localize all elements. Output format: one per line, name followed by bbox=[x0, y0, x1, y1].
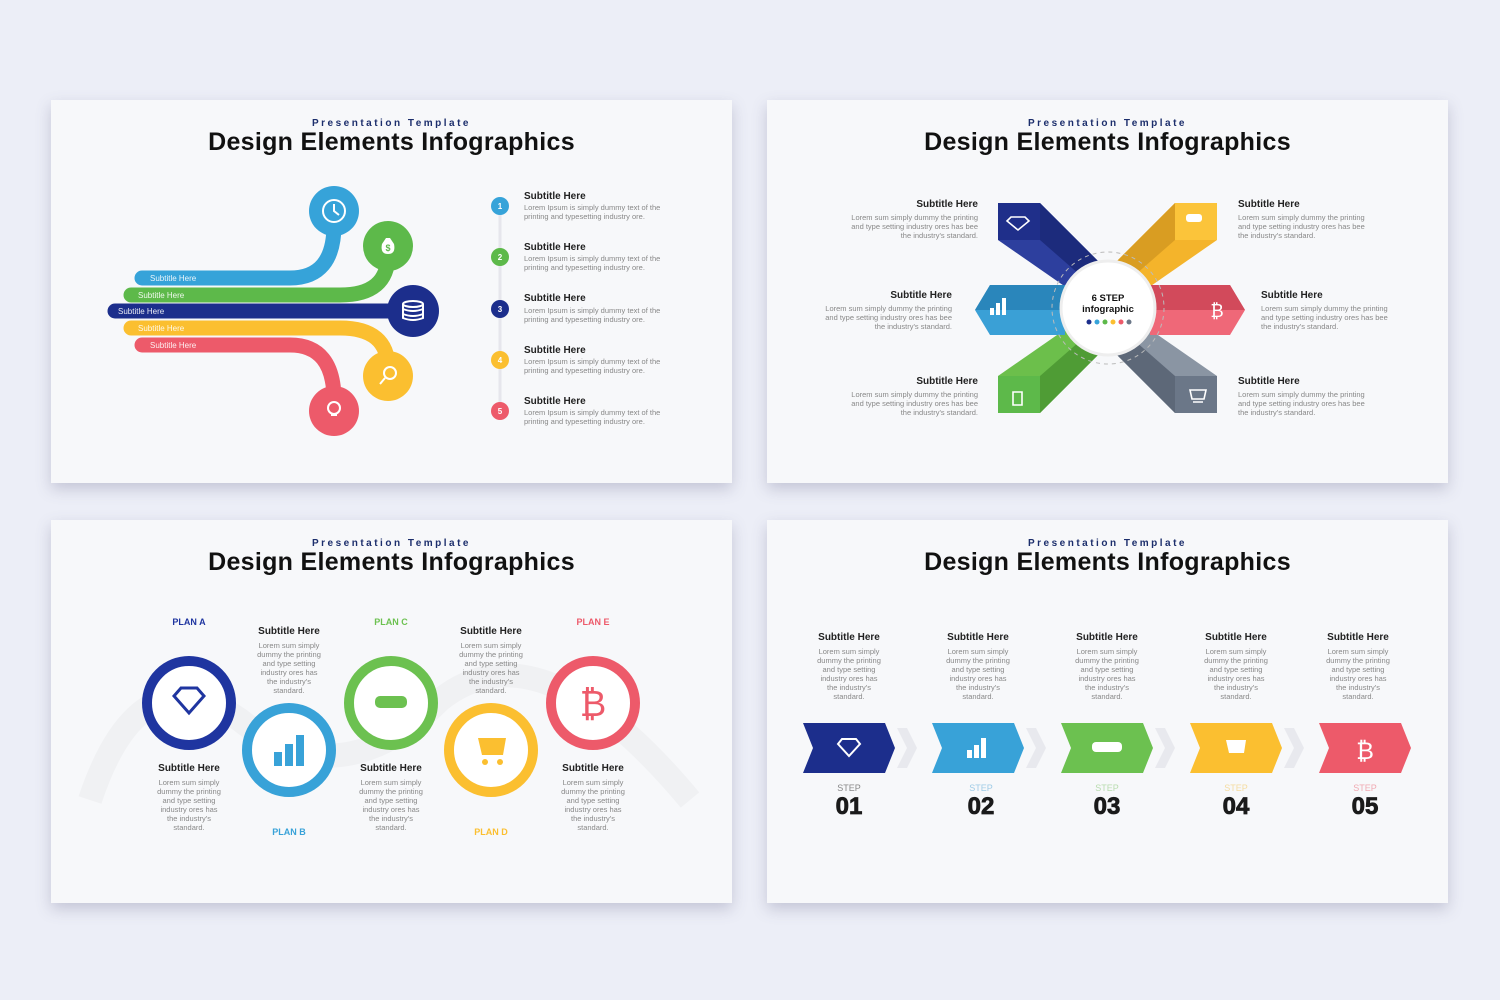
step texts bbox=[817, 632, 1390, 701]
list items bbox=[524, 191, 660, 426]
step arrows: STEP bbox=[1224, 783, 1248, 793]
subtitle: Presentation Template bbox=[1028, 538, 1187, 549]
panel: plans: industry ores has bbox=[362, 805, 420, 814]
panel: 6 step infographic: and type setting industry ores has bee bbox=[1261, 313, 1388, 322]
panel: plans: and type setting bbox=[567, 796, 619, 805]
panel: plans: dummy the printing bbox=[561, 787, 625, 796]
panel: steps: dummy the printing bbox=[1204, 656, 1268, 665]
star diagram: ₿ bbox=[1210, 301, 1224, 321]
panel: steps: Subtitle Here bbox=[818, 632, 880, 643]
panel: steps: and type setting bbox=[1332, 665, 1384, 674]
title: Design Elements Infographics bbox=[924, 128, 1291, 156]
panel: 6 step infographic: Subtitle Here bbox=[1238, 376, 1300, 387]
panel: steps: Subtitle Here bbox=[947, 632, 1009, 643]
star diagram bbox=[975, 203, 1245, 413]
panel: plans: Lorem sum simply bbox=[159, 778, 219, 787]
panel: 6 step infographic: and type setting industry ores has bee bbox=[851, 222, 978, 231]
panel: plans: the industry's bbox=[469, 677, 513, 686]
panel: 6 step infographic: Lorem sum simply dummy the printing bbox=[1238, 390, 1365, 399]
subtitle: Presentation Template bbox=[312, 118, 471, 129]
panel: 6 step infographic: the industry's standard. bbox=[1238, 408, 1315, 417]
panel: plans: standard. bbox=[173, 823, 205, 832]
panel: steps: dummy the printing bbox=[946, 656, 1010, 665]
panel: 6 step infographic: Lorem sum simply dummy the printing bbox=[1238, 213, 1365, 222]
panel: plans: standard. bbox=[375, 823, 407, 832]
panel: 6 step infographic: and type setting industry ores has bee bbox=[1238, 399, 1365, 408]
panel: steps: Subtitle Here bbox=[1076, 632, 1138, 643]
panel: 6 step infographic: Subtitle Here bbox=[1238, 199, 1300, 210]
panel: branching roads: Subtitle Here bbox=[524, 242, 586, 253]
panel: plans: dummy the printing bbox=[459, 650, 523, 659]
panel: steps: Lorem sum simply bbox=[1206, 647, 1266, 656]
panel: 6 step infographic: Lorem sum simply dummy the printing bbox=[851, 390, 978, 399]
panel: plans: Subtitle Here bbox=[562, 763, 624, 774]
panel: plans: Subtitle Here bbox=[158, 763, 220, 774]
panel: 6 step infographic: the industry's standard. bbox=[875, 322, 952, 331]
panel: steps: and type setting bbox=[823, 665, 875, 674]
branching diagram: 1 bbox=[498, 202, 503, 211]
panel: steps: Lorem sum simply bbox=[948, 647, 1008, 656]
star diagram: infographic bbox=[1082, 304, 1134, 315]
side texts bbox=[825, 199, 1388, 417]
panel: plans: and type setting bbox=[263, 659, 315, 668]
panel: plans: Lorem sum simply bbox=[563, 778, 623, 787]
branching diagram: 4 bbox=[498, 356, 503, 365]
panel: steps: industry ores has bbox=[1329, 674, 1387, 683]
panel: branching roads: Subtitle Here bbox=[524, 396, 586, 407]
title: Design Elements Infographics bbox=[208, 128, 575, 156]
panel: 6 step infographic: Subtitle Here bbox=[916, 199, 978, 210]
panel: 6 step infographic: the industry's standard. bbox=[901, 408, 978, 417]
panel: steps: industry ores has bbox=[1078, 674, 1136, 683]
branching diagram: 2 bbox=[498, 253, 503, 262]
step arrows: STEP bbox=[969, 783, 993, 793]
panel: steps: Subtitle Here bbox=[1327, 632, 1389, 643]
panel: steps: Lorem sum simply bbox=[1077, 647, 1137, 656]
step arrows: STEP bbox=[1353, 783, 1377, 793]
panel: 6 step infographic: Lorem sum simply dummy the printing bbox=[1261, 304, 1388, 313]
panel: plans: standard. bbox=[273, 686, 305, 695]
panel: plans: industry ores has bbox=[462, 668, 520, 677]
panel: 6 step infographic: Subtitle Here bbox=[916, 376, 978, 387]
plan texts bbox=[157, 626, 625, 832]
panel: plans: industry ores has bbox=[564, 805, 622, 814]
panel: 6 step infographic: Subtitle Here bbox=[890, 290, 952, 301]
panel: steps: dummy the printing bbox=[1075, 656, 1139, 665]
panel: 6 step infographic: Lorem sum simply dummy the printing bbox=[851, 213, 978, 222]
panel: branching roads: Lorem Ipsum is simply dummy text of the bbox=[524, 408, 660, 417]
branching diagram: Subtitle Here bbox=[150, 341, 197, 350]
branching diagram bbox=[108, 186, 509, 436]
plan circles: PLAN A bbox=[172, 617, 206, 627]
title: Design Elements Infographics bbox=[208, 548, 575, 576]
panel: steps: industry ores has bbox=[820, 674, 878, 683]
branching diagram: 5 bbox=[498, 407, 503, 416]
panel: branching roads: printing and typesetting industry ore. bbox=[524, 417, 645, 426]
panel: steps: Lorem sum simply bbox=[819, 647, 879, 656]
panel: steps: the industry's bbox=[1336, 683, 1380, 692]
panel: 6 step infographic: Lorem sum simply dummy the printing bbox=[825, 304, 952, 313]
panel: 6 step infographic bbox=[767, 100, 1448, 483]
subtitle: Presentation Template bbox=[312, 538, 471, 549]
panel: plans: Lorem sum simply bbox=[461, 641, 521, 650]
panel: plans bbox=[51, 520, 732, 903]
plan circles: PLAN C bbox=[374, 617, 408, 627]
branching diagram: Subtitle Here bbox=[150, 274, 197, 283]
step arrows: 01 bbox=[836, 793, 862, 820]
panel: steps: and type setting bbox=[952, 665, 1004, 674]
panel: branching roads: Subtitle Here bbox=[524, 345, 586, 356]
panel: 6 step infographic: and type setting industry ores has bee bbox=[825, 313, 952, 322]
panel: branching roads: Subtitle Here bbox=[524, 293, 586, 304]
panel: steps: the industry's bbox=[1214, 683, 1258, 692]
panel: branching roads: printing and typesetting industry ore. bbox=[524, 212, 645, 221]
panel: steps: standard. bbox=[1342, 692, 1374, 701]
panel: 6 step infographic: and type setting industry ores has bee bbox=[1238, 222, 1365, 231]
step arrows bbox=[803, 723, 1411, 820]
step arrows: 04 bbox=[1223, 793, 1250, 820]
panel: plans: industry ores has bbox=[160, 805, 218, 814]
panel: plans: the industry's bbox=[167, 814, 211, 823]
panel: plans: dummy the printing bbox=[257, 650, 321, 659]
branching diagram: $ bbox=[385, 243, 391, 253]
plan circles: ₿ bbox=[580, 683, 606, 724]
title: Design Elements Infographics bbox=[924, 548, 1291, 576]
panel: plans: industry ores has bbox=[260, 668, 318, 677]
panel: branching roads: Subtitle Here bbox=[524, 191, 586, 202]
panel: plans: Lorem sum simply bbox=[361, 778, 421, 787]
panel: branching roads bbox=[51, 100, 732, 483]
panel: branching roads: printing and typesetting industry ore. bbox=[524, 315, 645, 324]
panel: branching roads: printing and typesetting industry ore. bbox=[524, 263, 645, 272]
panel: plans: Subtitle Here bbox=[258, 626, 320, 637]
panel: 6 step infographic: the industry's standard. bbox=[1238, 231, 1315, 240]
panel: plans: the industry's bbox=[267, 677, 311, 686]
star diagram: 6 STEP bbox=[1092, 293, 1125, 304]
panel: plans: Subtitle Here bbox=[360, 763, 422, 774]
plan circles: PLAN B bbox=[272, 827, 306, 837]
plan circles bbox=[142, 617, 640, 837]
panel: 6 step infographic: the industry's standard. bbox=[901, 231, 978, 240]
panel: steps: standard. bbox=[833, 692, 865, 701]
panel: plans: standard. bbox=[475, 686, 507, 695]
panel: steps: standard. bbox=[962, 692, 994, 701]
panel: steps: industry ores has bbox=[949, 674, 1007, 683]
panel: steps: the industry's bbox=[827, 683, 871, 692]
branching diagram: 3 bbox=[498, 305, 503, 314]
panel: branching roads: Lorem Ipsum is simply dummy text of the bbox=[524, 203, 660, 212]
panel: plans: and type setting bbox=[465, 659, 517, 668]
step arrows: STEP bbox=[1095, 783, 1119, 793]
panel: plans: standard. bbox=[577, 823, 609, 832]
branching diagram: Subtitle Here bbox=[138, 324, 185, 333]
step arrows: 03 bbox=[1094, 793, 1120, 820]
step arrows: 05 bbox=[1352, 793, 1378, 820]
panel: branching roads: Lorem Ipsum is simply dummy text of the bbox=[524, 357, 660, 366]
step arrows: 02 bbox=[968, 793, 994, 820]
panel: plans: dummy the printing bbox=[359, 787, 423, 796]
panel: steps: standard. bbox=[1091, 692, 1123, 701]
panel: steps: dummy the printing bbox=[1326, 656, 1390, 665]
panel: steps: the industry's bbox=[1085, 683, 1129, 692]
panel: 6 step infographic: and type setting industry ores has bee bbox=[851, 399, 978, 408]
panel: steps: Subtitle Here bbox=[1205, 632, 1267, 643]
branching diagram: Subtitle Here bbox=[118, 307, 165, 316]
panel: plans: dummy the printing bbox=[157, 787, 221, 796]
panel: branching roads: printing and typesetting industry ore. bbox=[524, 366, 645, 375]
panel: steps: Lorem sum simply bbox=[1328, 647, 1388, 656]
panel: 6 step infographic: the industry's standard. bbox=[1261, 322, 1338, 331]
plan circles: PLAN E bbox=[576, 617, 610, 627]
panel: plans: Subtitle Here bbox=[460, 626, 522, 637]
panel: steps: industry ores has bbox=[1207, 674, 1265, 683]
panel: steps: and type setting bbox=[1210, 665, 1262, 674]
panel: steps: the industry's bbox=[956, 683, 1000, 692]
step arrows: ₿ bbox=[1356, 738, 1374, 765]
panel: steps bbox=[767, 520, 1448, 903]
plan circles: PLAN D bbox=[474, 827, 508, 837]
panel: branching roads: Lorem Ipsum is simply dummy text of the bbox=[524, 254, 660, 263]
panel: plans: and type setting bbox=[163, 796, 215, 805]
branching diagram: Subtitle Here bbox=[138, 291, 185, 300]
panel: 6 step infographic: Subtitle Here bbox=[1261, 290, 1323, 301]
panel: plans: Lorem sum simply bbox=[259, 641, 319, 650]
panel: branching roads: Lorem Ipsum is simply dummy text of the bbox=[524, 306, 660, 315]
panel: plans: and type setting bbox=[365, 796, 417, 805]
panel: steps: dummy the printing bbox=[817, 656, 881, 665]
subtitle: Presentation Template bbox=[1028, 118, 1187, 129]
panel: plans: the industry's bbox=[571, 814, 615, 823]
panel: plans: the industry's bbox=[369, 814, 413, 823]
panel: steps: and type setting bbox=[1081, 665, 1133, 674]
step arrows: STEP bbox=[837, 783, 861, 793]
panel: steps: standard. bbox=[1220, 692, 1252, 701]
